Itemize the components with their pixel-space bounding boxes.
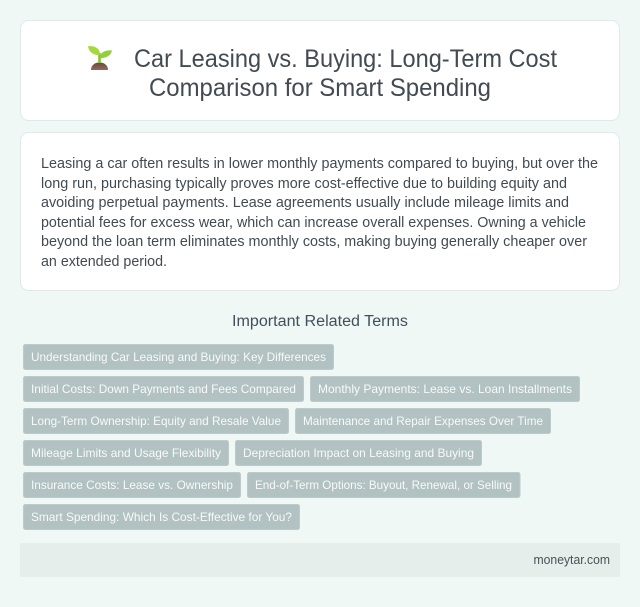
tag: Insurance Costs: Lease vs. Ownership xyxy=(31,478,233,492)
tag xyxy=(24,408,288,434)
tag: Maintenance and Repair Expenses Over Time xyxy=(303,414,543,428)
panel: title card xyxy=(20,20,620,120)
text block: paragraph: beyond the loan term eliminates monthly costs, making buying generally cheaper over xyxy=(41,234,587,250)
text block: paragraph xyxy=(41,156,598,270)
title: Comparison for Smart Spending xyxy=(149,74,491,102)
text block: paragraph: an extended period. xyxy=(41,254,167,270)
text block: paragraph: potential fees for excess wear, which can increase overall expenses. Owning a vehicle xyxy=(41,215,586,231)
tag xyxy=(310,376,580,402)
panel: intro paragraph xyxy=(20,132,620,290)
tag xyxy=(236,440,482,466)
title xyxy=(134,45,557,102)
tag xyxy=(24,472,240,498)
tag xyxy=(24,344,334,370)
text block: paragraph: avoiding perpetual payments. Lease agreements usually include mileage limits and xyxy=(41,195,569,211)
title: Car Leasing vs. Buying: Long-Term Cost xyxy=(134,45,557,73)
footer xyxy=(20,543,620,577)
tag xyxy=(24,440,228,466)
heading: related terms: Important Related Terms xyxy=(232,313,408,330)
tag xyxy=(24,504,300,530)
tag: Initial Costs: Down Payments and Fees Compared xyxy=(31,382,296,396)
text block: paragraph: long run, purchasing typically proves more cost-effective due to building equity and xyxy=(41,176,567,192)
tag: Smart Spending: Which Is Cost-Effective for You? xyxy=(31,510,292,524)
tag: Understanding Car Leasing and Buying: Key Differences xyxy=(31,350,326,364)
tag: Depreciation Impact on Leasing and Buying xyxy=(243,446,474,460)
tag: Long-Term Ownership: Equity and Resale Value xyxy=(31,414,281,428)
tag: Monthly Payments: Lease vs. Loan Installments xyxy=(318,382,572,396)
tag list xyxy=(24,344,580,530)
tag xyxy=(296,408,550,434)
text block: paragraph: Leasing a car often results in lower monthly payments compared to buying, but over the xyxy=(41,156,598,172)
tag: End-of-Term Options: Buyout, Renewal, or Selling xyxy=(255,478,512,492)
footer source text: moneytar.com xyxy=(534,553,610,567)
tag xyxy=(24,376,304,402)
icon: sprout xyxy=(88,46,112,70)
tag xyxy=(248,472,520,498)
tag: Mileage Limits and Usage Flexibility xyxy=(31,446,221,460)
